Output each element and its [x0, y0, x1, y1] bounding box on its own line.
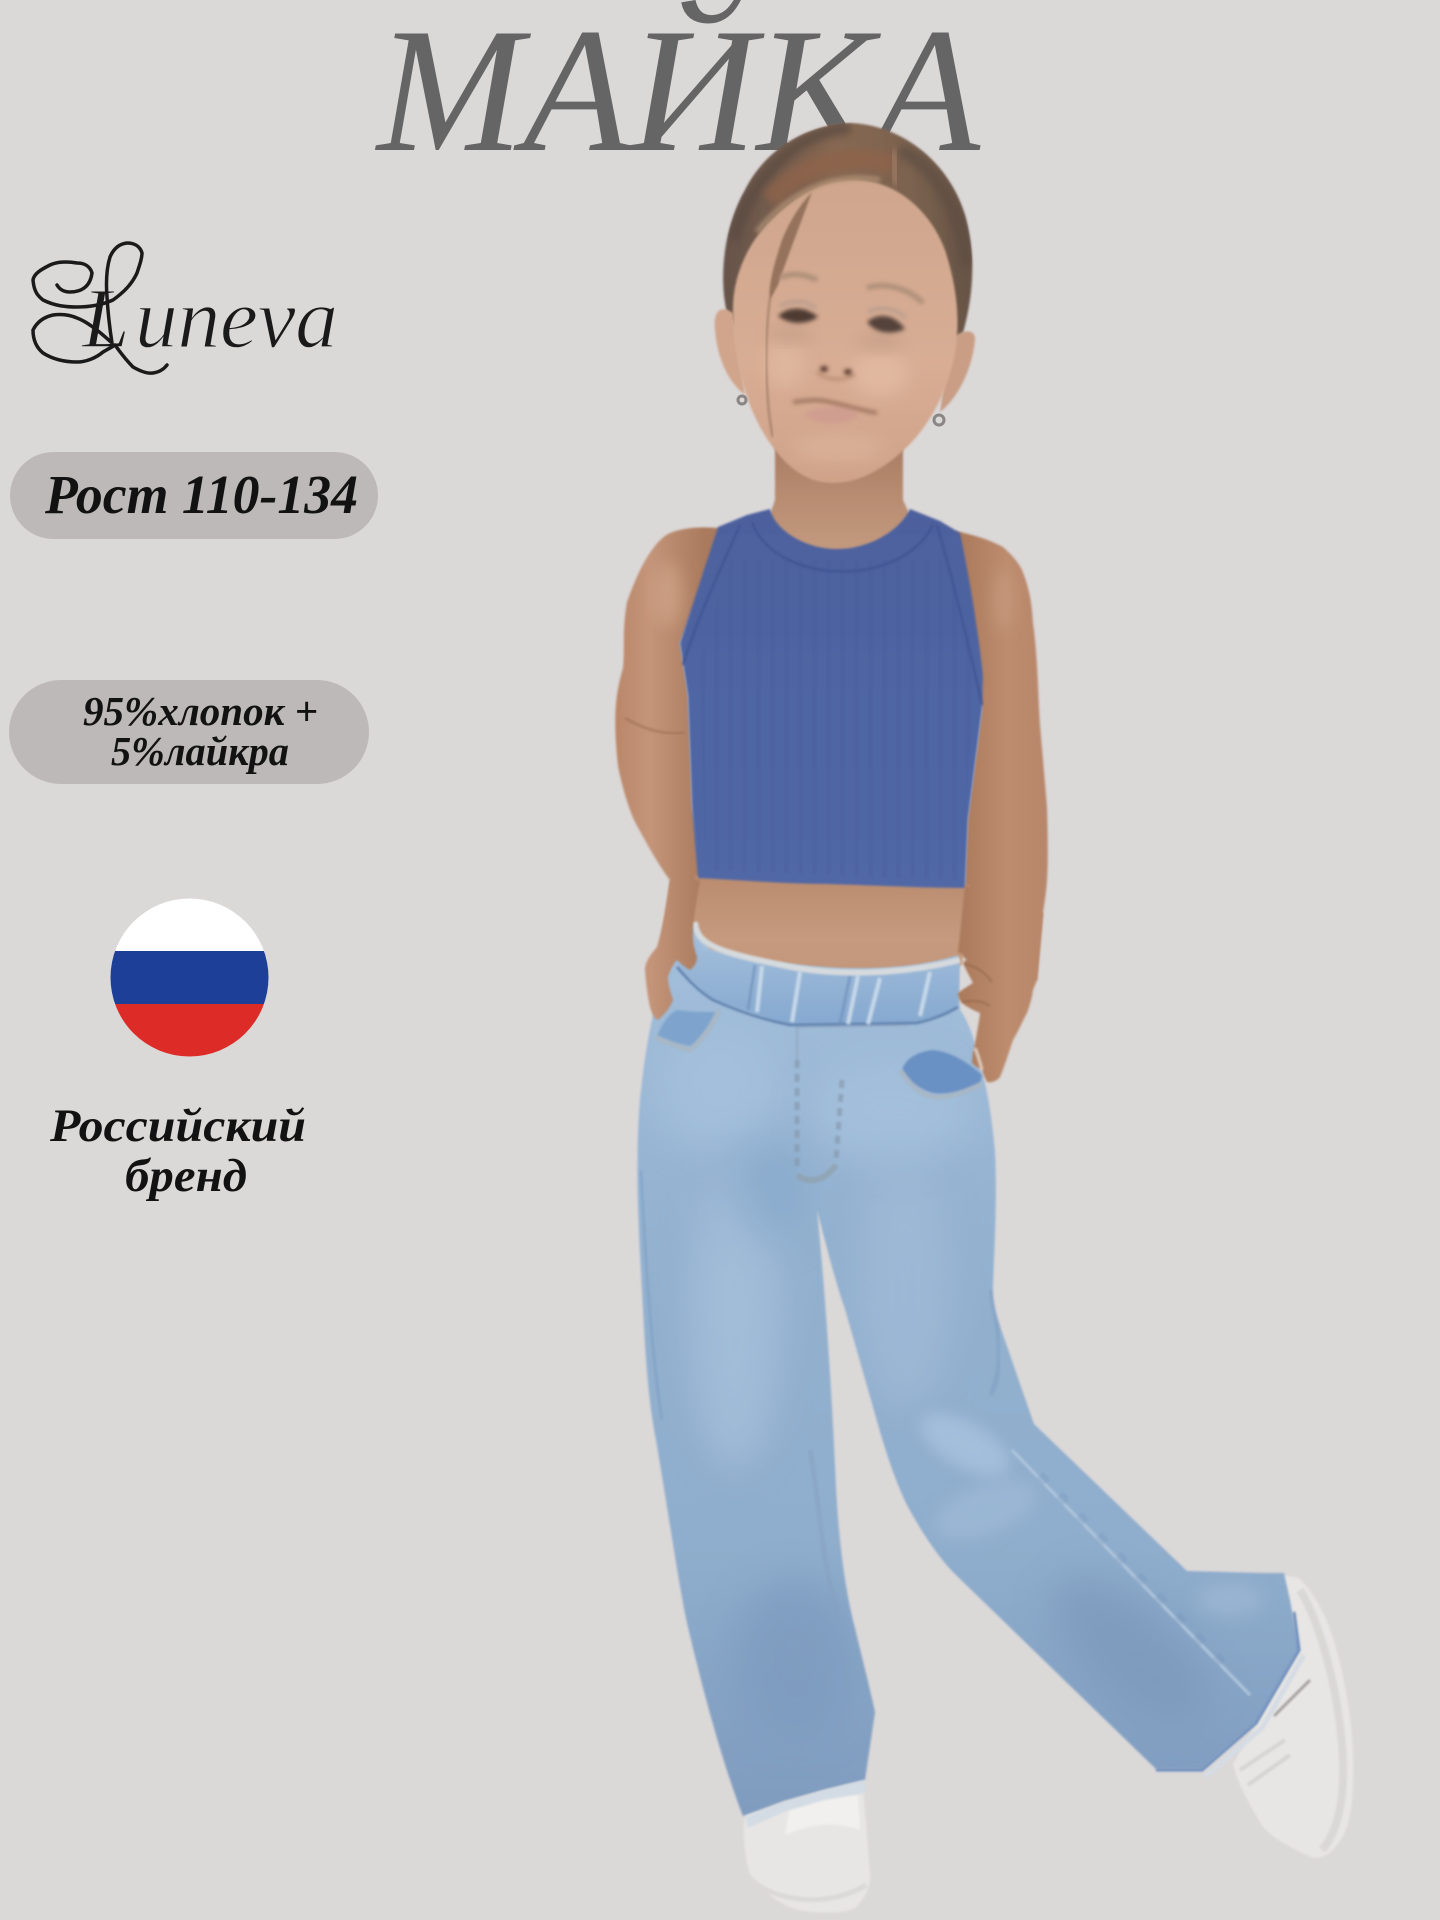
pill: fabric composition: 5%лайкра	[111, 728, 289, 774]
left shoe	[744, 1785, 870, 1913]
pill: height range	[10, 452, 378, 539]
right upper arm	[955, 531, 1048, 985]
pill: height range: Рост 110-134	[44, 464, 358, 525]
front hair strands	[757, 150, 896, 437]
caption: Russian brand: Российский	[49, 1100, 306, 1152]
model photo illustration	[615, 123, 1353, 1913]
left arm highlight and elbow crease	[625, 563, 685, 733]
jeans	[637, 924, 1299, 1816]
fly stitching	[797, 1060, 842, 1170]
pill: fabric composition: 95%хлопок +	[83, 688, 318, 734]
denim wash highlights and shadows	[694, 1206, 776, 1457]
caption: Russian brand	[49, 1100, 306, 1202]
icon: Russian flag	[110, 898, 268, 1056]
right shoe	[1233, 1575, 1353, 1858]
hair	[723, 123, 972, 350]
belly	[693, 875, 970, 982]
face shading	[765, 328, 910, 462]
blue tank top	[680, 509, 983, 888]
waistband	[677, 922, 960, 1025]
face	[733, 180, 958, 483]
right arm highlight	[993, 568, 1013, 632]
pill: fabric composition	[9, 680, 369, 784]
caption: Russian brand: бренд	[125, 1150, 247, 1202]
left hand	[645, 880, 700, 1020]
left upper arm	[615, 527, 725, 960]
ears	[715, 309, 975, 412]
brand logo: Luneva: Luneva	[80, 270, 338, 366]
brand logo: Luneva	[33, 243, 338, 373]
neck	[768, 440, 912, 556]
facial features	[778, 274, 923, 423]
frayed hems	[745, 1612, 1304, 1828]
earrings	[738, 396, 944, 425]
right hand	[958, 885, 1043, 1082]
pockets	[655, 1010, 982, 1097]
